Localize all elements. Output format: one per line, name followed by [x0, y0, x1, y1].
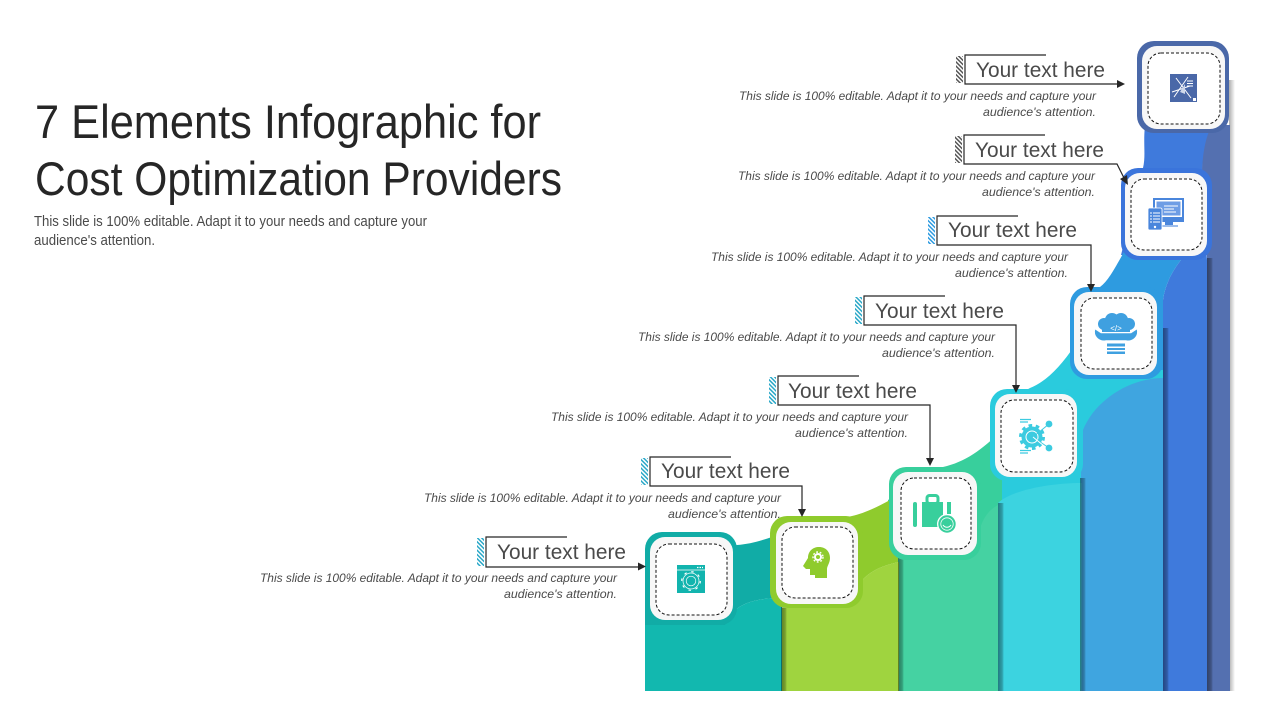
callout 6: Your text here	[661, 460, 790, 483]
title: 7 Elements Infographic for	[35, 95, 541, 148]
column 4: cyan light	[998, 483, 1082, 691]
callout 4: Your text here	[875, 300, 1004, 323]
callout 3: audience's attention.	[955, 266, 1068, 280]
callout 6: This slide is 100% editable. Adapt it to your needs and capture your	[424, 491, 782, 505]
icon: gear in window	[677, 565, 705, 593]
column 6: blue	[1121, 125, 1212, 691]
column 4: cyan dark wave	[990, 335, 1163, 500]
callout 4: This slide is 100% editable. Adapt it to your needs and capture your	[638, 330, 996, 344]
title	[35, 95, 562, 205]
icon: head with gear	[803, 547, 830, 578]
callout 1: top element: Your text here	[976, 59, 1105, 82]
callout 5: audience's attention.	[795, 426, 908, 440]
element 5 card: cloud and wrench icon	[1070, 287, 1163, 379]
callout 7: bottom element: audience's attention.	[504, 587, 617, 601]
callout 2: Your text here	[975, 139, 1104, 162]
subtitle text block	[34, 214, 427, 249]
callout 1: top element	[739, 55, 1125, 119]
callout 5	[551, 376, 934, 466]
callout 4	[638, 296, 1020, 393]
subtitle text block: audience's attention.	[34, 233, 155, 249]
element 1 card: gear window icon	[645, 532, 737, 625]
column 2: green dark wave	[790, 495, 899, 600]
column 5: sky light	[1081, 378, 1163, 691]
callout 7: bottom element: This slide is 100% editable. Adapt it to your needs and capture your	[260, 571, 618, 585]
column 3: mint dark wave	[888, 430, 1002, 560]
callout 2: This slide is 100% editable. Adapt it to your needs and capture your	[738, 169, 1096, 183]
element 7 card: blueprint icon	[1137, 41, 1229, 133]
callout 1: top element: This slide is 100% editable. Adapt it to your needs and capture your	[739, 89, 1097, 103]
callout 3: This slide is 100% editable. Adapt it to your needs and capture your	[711, 250, 1069, 264]
title: Cost Optimization Providers	[35, 152, 562, 205]
element 6 card: monitor and tablet icon	[1121, 168, 1212, 260]
callout 6	[424, 457, 806, 521]
element 4 card: gear network icon	[990, 389, 1083, 481]
callout 7: bottom element	[260, 537, 646, 601]
element 2 card: head icon	[770, 516, 863, 608]
column 7: slate	[1202, 125, 1230, 691]
callout 7: bottom element: Your text here	[497, 541, 626, 564]
icon: blueprint square	[1170, 74, 1197, 102]
column 3: mint light	[898, 505, 998, 691]
column 5: sky dark wave	[1085, 250, 1190, 380]
callout 3: Your text here	[948, 219, 1077, 242]
callout 4: audience's attention.	[882, 346, 995, 360]
subtitle text block: This slide is 100% editable. Adapt it to your needs and capture your	[34, 214, 427, 230]
column 2: green light	[781, 562, 899, 691]
callout 3	[711, 216, 1095, 292]
element 3 card: suitcase icon	[889, 467, 981, 560]
column 1: teal light	[645, 598, 782, 691]
callout 6: audience's attention.	[668, 507, 781, 521]
callout 2: audience's attention.	[982, 185, 1095, 199]
column 1: teal dark wave	[645, 536, 782, 626]
icon: monitor and tablet	[1148, 198, 1184, 230]
icon: cloud with wrench: </>	[1110, 324, 1122, 333]
icon: suitcase with smiley	[913, 496, 957, 534]
callout 5: This slide is 100% editable. Adapt it to your needs and capture your	[551, 410, 909, 424]
callout 1: top element: audience's attention.	[983, 105, 1096, 119]
staircase chart of seven columns	[645, 80, 1235, 691]
icon: gear with connected nodes	[1020, 420, 1052, 453]
callout 2	[738, 135, 1128, 199]
callout 5: Your text here	[788, 380, 917, 403]
